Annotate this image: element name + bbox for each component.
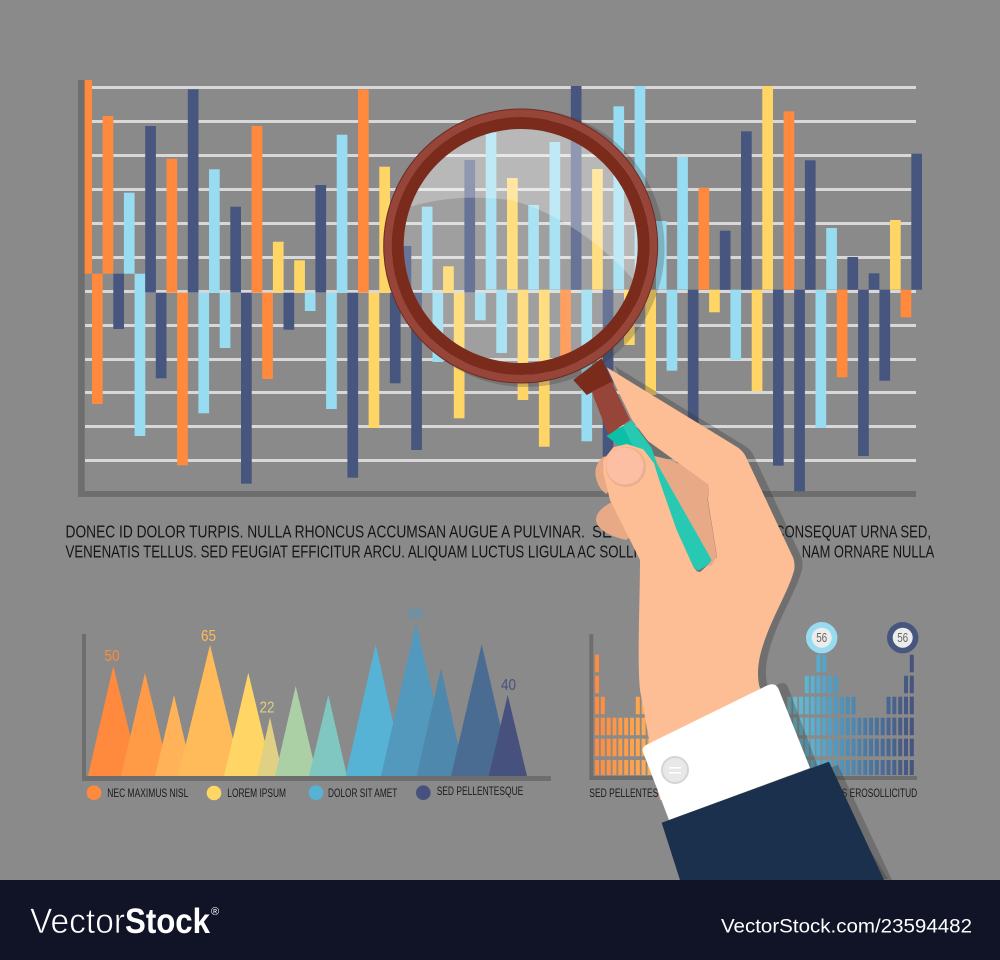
hand shadow bbox=[611, 366, 888, 879]
thumbnail bbox=[606, 448, 644, 484]
badge: 56 navy: 56 bbox=[897, 630, 908, 645]
logo: ® bbox=[211, 906, 219, 918]
logo bbox=[30, 902, 219, 941]
magnifier collar bbox=[573, 358, 612, 395]
paragraph text: CONSEQUAT URNA SED, bbox=[775, 522, 931, 542]
lens ring outer bbox=[388, 113, 654, 379]
teal grip bbox=[607, 421, 712, 571]
magnifier handle bbox=[592, 382, 630, 435]
lens rim line bbox=[384, 109, 658, 383]
triangle chart legend: DOLOR SIT AMET bbox=[328, 788, 397, 800]
segmented chart axes bbox=[589, 634, 917, 780]
triangle chart axes bbox=[82, 634, 551, 781]
teal grip shade bbox=[607, 426, 698, 571]
triangle chart legend: SED PELLENTESQUE bbox=[437, 786, 524, 798]
paragraph text: VENENATIS TELLUS. SED FEUGIAT EFFICITUR ARCU. ALIQUAM LUCTUS LIGULA AC SOLLI bbox=[66, 542, 637, 562]
segmented bar chart bbox=[589, 622, 918, 800]
chart bars bbox=[85, 80, 922, 491]
shirt cuff bbox=[643, 684, 810, 820]
chart axes bbox=[78, 80, 916, 497]
triangle value labels: 50 bbox=[104, 648, 120, 665]
triangle value labels: 22 bbox=[260, 700, 274, 716]
jacket sleeve bbox=[662, 762, 884, 880]
triangle value labels: 40 bbox=[501, 677, 516, 694]
paragraph text: DONEC ID DOLOR TURPIS. NULLA RHONCUS ACCUMSAN AUGUE A PULVINAR. bbox=[66, 522, 585, 542]
triangle value labels: 99 bbox=[408, 606, 423, 623]
thumb bbox=[603, 444, 700, 577]
triangle chart legend: LOREM IPSUM bbox=[227, 788, 286, 800]
paragraph text: NAM ORNARE NULLA bbox=[802, 542, 935, 562]
main chart bbox=[78, 80, 922, 497]
hand with magnifier handle bbox=[573, 358, 795, 800]
sleeve shadow bbox=[662, 765, 892, 880]
triangle chart legend: NEC MAXIMUS NISL bbox=[107, 788, 189, 800]
thumbnail ring bbox=[606, 447, 646, 487]
back finger bbox=[595, 456, 615, 494]
segmented bars bbox=[597, 655, 912, 775]
triangle value labels bbox=[104, 606, 516, 716]
palm shade bbox=[650, 455, 717, 566]
triangle chart bbox=[82, 606, 551, 800]
logo: Stock bbox=[125, 902, 210, 941]
lower finger bbox=[596, 500, 640, 540]
lens highlight bbox=[410, 129, 638, 279]
triangle value labels: 65 bbox=[201, 628, 216, 645]
lens glass bbox=[403, 128, 639, 364]
magnifying glass lens bbox=[384, 100, 660, 383]
footer bar bbox=[0, 880, 1000, 960]
paragraph text bbox=[66, 522, 935, 562]
image id: VectorStock.com/23594482 bbox=[721, 916, 972, 938]
badge: 56 light blue bbox=[806, 622, 837, 653]
lens shadow bbox=[390, 113, 660, 383]
hand body bbox=[607, 367, 795, 800]
lens ring inner bbox=[398, 123, 644, 369]
chart grid lines bbox=[85, 86, 916, 462]
segmented chart caption: S EROSOLLICITUD bbox=[842, 788, 917, 800]
badge: 56 light blue: 56 bbox=[816, 630, 827, 645]
cufflink bbox=[662, 757, 688, 783]
triangle series bbox=[88, 623, 527, 776]
segmented chart caption: SED PELLENTES bbox=[589, 788, 659, 800]
triangle chart legend bbox=[87, 785, 524, 800]
logo: Vector bbox=[30, 902, 125, 941]
segmented chart caption bbox=[589, 788, 917, 800]
badge: 56 navy bbox=[887, 622, 918, 653]
paragraph text: SE bbox=[592, 522, 612, 542]
